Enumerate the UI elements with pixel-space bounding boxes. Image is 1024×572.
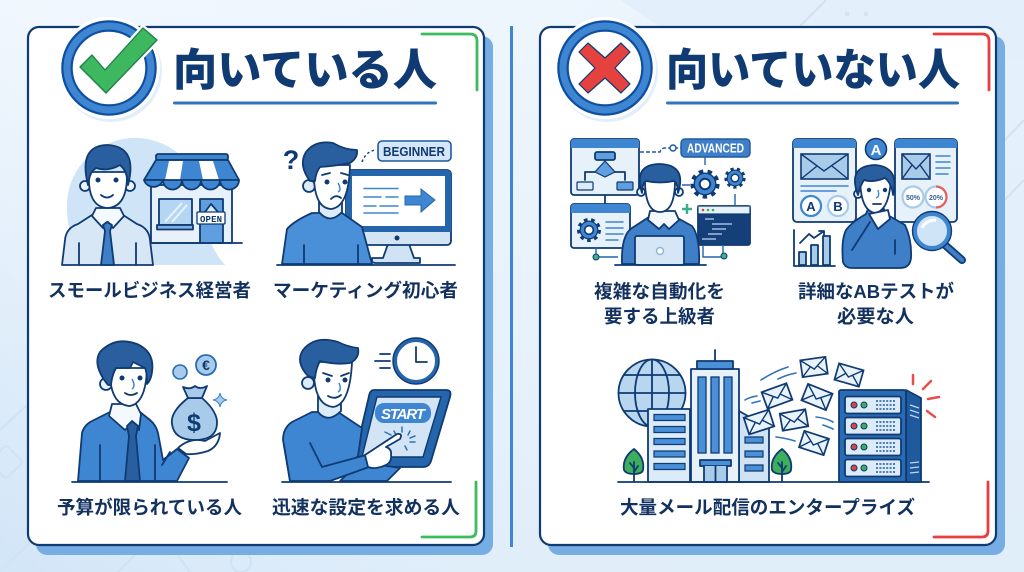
settings window bbox=[571, 196, 630, 248]
clock bbox=[375, 338, 439, 384]
email window B: 20% bbox=[929, 195, 944, 202]
tablet bbox=[354, 390, 450, 467]
label: 詳細なABテストが bbox=[798, 281, 954, 302]
person in suit bbox=[78, 341, 189, 481]
monitor bbox=[346, 170, 451, 263]
red corner top bbox=[934, 34, 989, 90]
server rack bbox=[839, 390, 921, 482]
advanced badge bbox=[681, 139, 750, 157]
label: 複雑な自動化を bbox=[594, 281, 725, 302]
money bag: $ bbox=[187, 409, 201, 437]
icon: enterprise mass email bbox=[618, 350, 939, 482]
green corner top bbox=[422, 34, 477, 90]
storefront: OPEN bbox=[200, 215, 222, 225]
thinking person bbox=[842, 165, 911, 268]
coins: € bbox=[202, 357, 210, 373]
label: 予算が限られている人 bbox=[57, 497, 242, 518]
email window B: 50% bbox=[906, 195, 921, 202]
heading underline bbox=[666, 102, 959, 104]
icon: AB testing bbox=[793, 138, 962, 268]
magnifier bbox=[912, 212, 962, 260]
email window A bbox=[793, 139, 856, 222]
sparkle bbox=[213, 393, 227, 407]
label: 大量メール配信のエンタープライズ bbox=[620, 497, 915, 518]
label: 要する上級者 bbox=[604, 306, 715, 327]
panel card bbox=[540, 27, 1005, 555]
label: マーケティング初心者 bbox=[273, 280, 458, 301]
panel: poor fit bbox=[540, 17, 1005, 555]
red corner bottom bbox=[934, 482, 988, 537]
tablet: START bbox=[381, 406, 427, 423]
beginner badge bbox=[362, 141, 451, 162]
panel card bbox=[28, 27, 493, 555]
flowchart window bbox=[571, 139, 639, 195]
coins bbox=[173, 355, 216, 379]
divider bbox=[510, 26, 513, 547]
email window B bbox=[895, 139, 957, 222]
bar chart bbox=[794, 230, 835, 266]
icon: quick setup bbox=[282, 338, 451, 482]
gears bbox=[682, 157, 744, 214]
person in shirt bbox=[62, 145, 153, 265]
heading: 向いていない人 bbox=[666, 46, 960, 95]
money bag bbox=[172, 386, 217, 440]
A badge bbox=[866, 138, 886, 160]
hand bbox=[178, 433, 220, 454]
buildings bbox=[648, 350, 769, 482]
email window A: A bbox=[806, 199, 816, 214]
confused person bbox=[282, 142, 372, 264]
panel: good fit bbox=[28, 17, 493, 555]
beginner badge: BEGINNER bbox=[383, 144, 446, 159]
icon: advanced user bbox=[571, 139, 750, 265]
email window A: B bbox=[833, 199, 843, 214]
envelopes bbox=[744, 357, 864, 455]
label: 必要な人 bbox=[837, 306, 915, 327]
connectors bbox=[596, 245, 724, 257]
icon: marketing beginner bbox=[277, 141, 455, 265]
globe bbox=[618, 360, 686, 426]
trees bbox=[624, 449, 791, 482]
icon: small business owner bbox=[62, 138, 242, 265]
heading underline bbox=[173, 102, 437, 104]
heading: 向いている人 bbox=[173, 46, 437, 95]
advanced badge: ADVANCED bbox=[687, 142, 744, 156]
code window bbox=[698, 206, 750, 245]
alert marks bbox=[913, 375, 939, 417]
person pointing bbox=[283, 340, 401, 481]
icon: cross badge bbox=[554, 17, 658, 122]
icon: check badge bbox=[58, 17, 162, 122]
label: 迅速な設定を求める人 bbox=[272, 497, 460, 518]
icon: limited budget bbox=[72, 341, 227, 482]
person with laptop bbox=[622, 164, 699, 265]
label: スモールビジネス経営者 bbox=[48, 280, 251, 301]
A badge: A bbox=[871, 142, 882, 159]
question mark: ? bbox=[283, 145, 299, 175]
storefront bbox=[144, 154, 242, 243]
green corner bottom bbox=[422, 482, 476, 537]
